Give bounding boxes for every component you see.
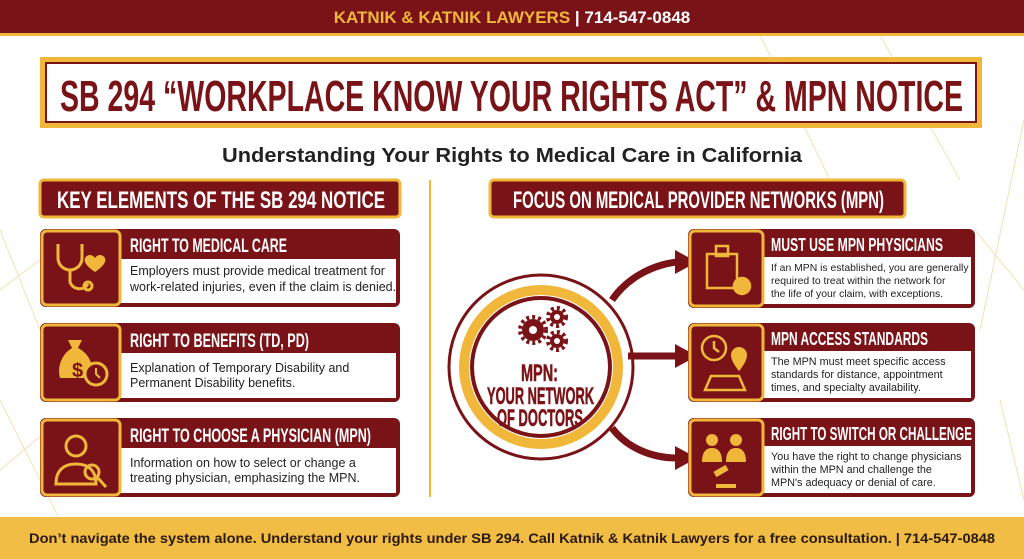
- icon: clock and map pin: [702, 336, 745, 390]
- left card 2: [40, 323, 400, 402]
- left card 1: work-related injuries, even if the claim is denied.: [129, 280, 396, 294]
- title: [40, 57, 982, 128]
- circle: MPN network: OF DOCTORS: [497, 405, 583, 432]
- left heading: KEY ELEMENTS OF THE SB 294 NOTICE: [57, 187, 385, 214]
- left heading: [40, 180, 400, 217]
- right card 2: [688, 323, 975, 402]
- right card 2: standards for distance, appointment: [771, 369, 943, 381]
- right card 1: the life of your claim, with exceptions.: [771, 289, 943, 300]
- left card 1: Employers must provide medical treatment for: [130, 264, 385, 278]
- right card 3: You have the right to change physicians: [771, 451, 962, 463]
- left card 2: RIGHT TO BENEFITS (TD, PD): [130, 331, 309, 352]
- right card 1: [688, 229, 975, 308]
- footer: [0, 517, 1024, 559]
- left card 3: Information on how to select or change a: [130, 456, 356, 470]
- icon: money bag: $: [72, 360, 83, 382]
- right card 2: MPN ACCESS STANDARDS: [771, 329, 928, 349]
- icon: gears: [522, 310, 564, 348]
- circle: MPN network: [449, 275, 633, 459]
- left card 3: [40, 418, 400, 497]
- left card 3: RIGHT TO CHOOSE A PHYSICIAN (MPN): [130, 426, 371, 447]
- right card 3: MPN's adequacy or denial of care.: [771, 477, 936, 489]
- right card 2: The MPN must meet specific access: [771, 356, 946, 368]
- icon: physician: [56, 436, 106, 487]
- left card 2: Explanation of Temporary Disability and: [130, 361, 349, 375]
- right card 3: [688, 418, 975, 497]
- left card 2: Permanent Disability benefits.: [130, 376, 295, 390]
- subtitle: Understanding Your Rights to Medical Care in California: [222, 145, 803, 167]
- left card 1: [40, 229, 400, 307]
- icon: doctors and gavel: [702, 434, 746, 488]
- right card 1: required to treat within the network for: [771, 276, 946, 287]
- icon: money bag: [59, 340, 107, 385]
- right card 2: times, and specialty availability.: [771, 382, 921, 394]
- right heading: [490, 180, 905, 217]
- circle: MPN network: YOUR NETWORK: [487, 383, 594, 410]
- top bar: KATNIK & KATNIK LAWYERS | 714-547-0848: [334, 8, 690, 27]
- top bar: [0, 0, 1024, 36]
- left card 3: treating physician, emphasizing the MPN.: [130, 471, 360, 485]
- arrows: [612, 250, 697, 470]
- right card 3: within the MPN and challenge the: [770, 464, 932, 476]
- footer: Don’t navigate the system alone. Understand your rights under SB 294. Call Katnik & Katnik Lawyers for a free consultation. | 714-547-0848: [29, 530, 995, 546]
- left card 1: RIGHT TO MEDICAL CARE: [130, 236, 287, 257]
- circle: MPN network: MPN:: [521, 360, 558, 387]
- right card 1: If an MPN is established, you are generally: [771, 263, 969, 274]
- icon: stethoscope: [58, 244, 92, 290]
- right card 1: MUST USE MPN PHYSICIANS: [771, 235, 943, 255]
- icon: hospital: [707, 246, 750, 294]
